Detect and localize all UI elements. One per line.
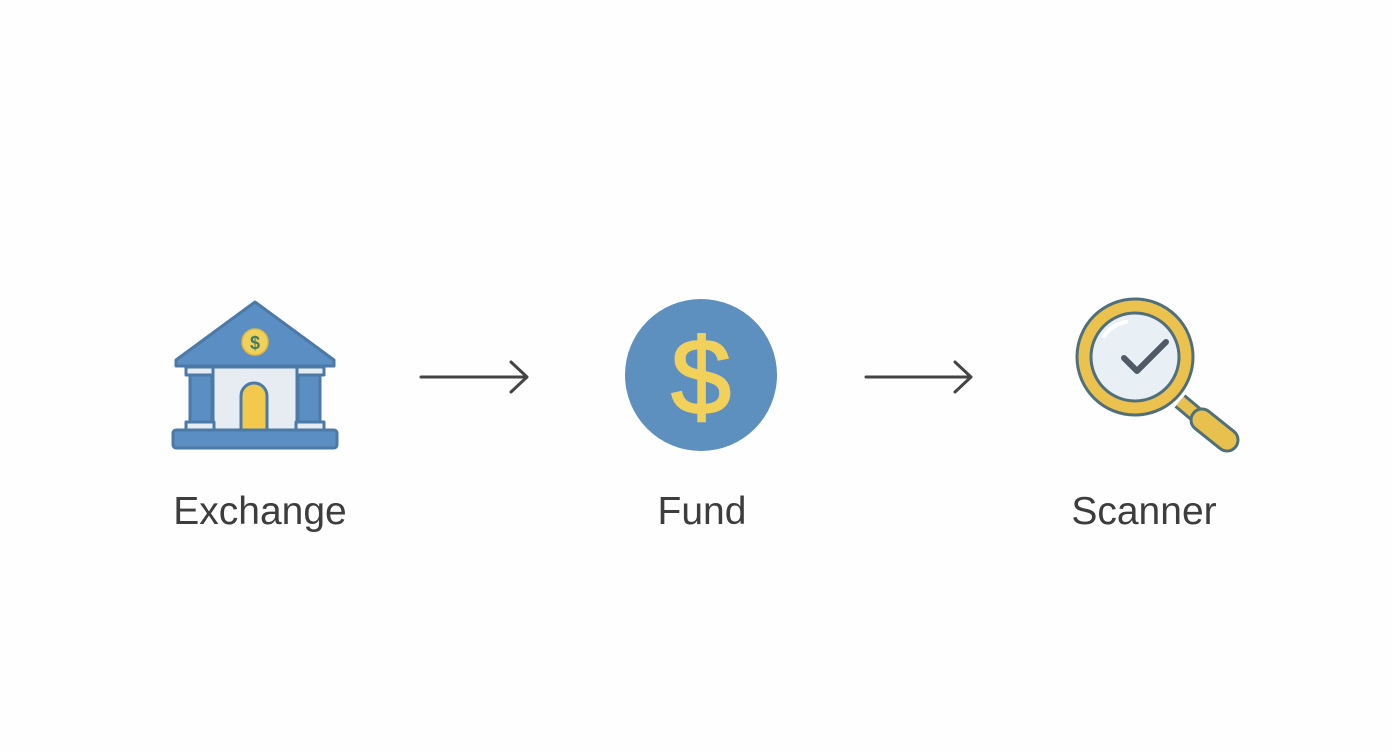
icon: bank exchange — [173, 302, 337, 448]
icon: fund coin — [625, 299, 777, 451]
icon: magnifier scanner — [1077, 299, 1227, 440]
arrow 1 — [421, 362, 527, 392]
label: Fund: Fund — [658, 490, 746, 533]
label: Scanner: Scanner — [1071, 490, 1217, 533]
arrow 2 — [866, 362, 971, 392]
icon: fund coin: $ — [671, 316, 731, 437]
label: Exchange: Exchange — [173, 490, 347, 533]
icon: bank exchange: $ — [250, 333, 260, 353]
